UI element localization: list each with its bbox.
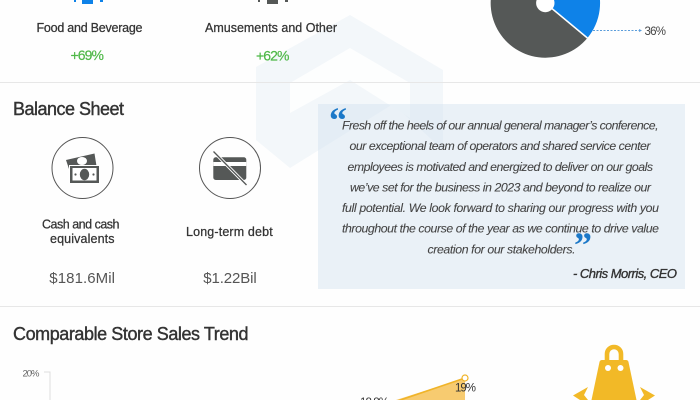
value: $181.6Mil: $181.6Mil bbox=[49, 270, 115, 287]
panel: cash and cash equivalents bbox=[42, 138, 120, 287]
value: +69%: +69% bbox=[70, 47, 104, 63]
quote text: employees is motivated and energized to deliver on our goals bbox=[348, 160, 653, 174]
icon: amusements stub bbox=[258, 0, 288, 4]
heading: comparable store sales trend: Comparable Store Sales Trend bbox=[13, 324, 248, 344]
quote text bbox=[342, 118, 659, 256]
area series bbox=[396, 375, 468, 400]
icon: closing quote mark: ” bbox=[574, 225, 592, 265]
label: food and beverage: Food and Beverage bbox=[36, 21, 143, 35]
quote text: Fresh off the heels of our annual general manager’s conference, bbox=[342, 118, 658, 132]
divider lines bbox=[0, 82, 700, 307]
quote attribution: - Chris Morris, CEO bbox=[573, 266, 677, 281]
quote text: throughout the course of the year as we continue to drive value bbox=[342, 222, 659, 236]
value: $1.22Bil: $1.22Bil bbox=[203, 270, 257, 287]
data label: 19%: 19% bbox=[455, 382, 476, 394]
panel: CEO quote bbox=[318, 100, 685, 289]
label: long-term debt: Long-term debt bbox=[186, 225, 273, 239]
label: cash and cash equivalents bbox=[42, 218, 120, 246]
y axis: 20% bbox=[22, 368, 40, 380]
callout: 36% bbox=[593, 26, 666, 38]
quote text: creation for our stakeholders. bbox=[428, 242, 576, 256]
icon: shopping bag bbox=[573, 347, 655, 400]
line chart: comparable store sales bbox=[22, 368, 476, 400]
label: cash and cash equivalents: equivalents bbox=[50, 232, 114, 246]
quote text: we’ve set for the business in 2023 and beyond to realize our bbox=[350, 180, 652, 194]
panel: revenue categories bbox=[36, 0, 337, 64]
icon: crossed-out credit card bbox=[200, 138, 260, 198]
quote text: full potential. We look forward to sharing our progress with you bbox=[342, 201, 659, 215]
icon: cash bbox=[52, 138, 113, 198]
label: cash and cash equivalents: Cash and cash bbox=[42, 218, 120, 232]
icon: opening quote mark: “ bbox=[329, 100, 347, 140]
quote text: our exceptional team of operators and shared service center bbox=[350, 139, 651, 153]
value: +62%: +62% bbox=[256, 48, 290, 64]
callout: 36%: 36% bbox=[644, 26, 666, 38]
heading: balance sheet: Balance Sheet bbox=[13, 99, 124, 119]
background watermark: hexagon logo bbox=[256, 15, 443, 168]
y axis bbox=[22, 368, 50, 400]
pie chart bbox=[491, 0, 666, 58]
icon: food and beverage stub bbox=[74, 0, 103, 4]
panel: long-term debt bbox=[186, 138, 273, 287]
label: amusements and other: Amusements and Other bbox=[205, 21, 337, 35]
